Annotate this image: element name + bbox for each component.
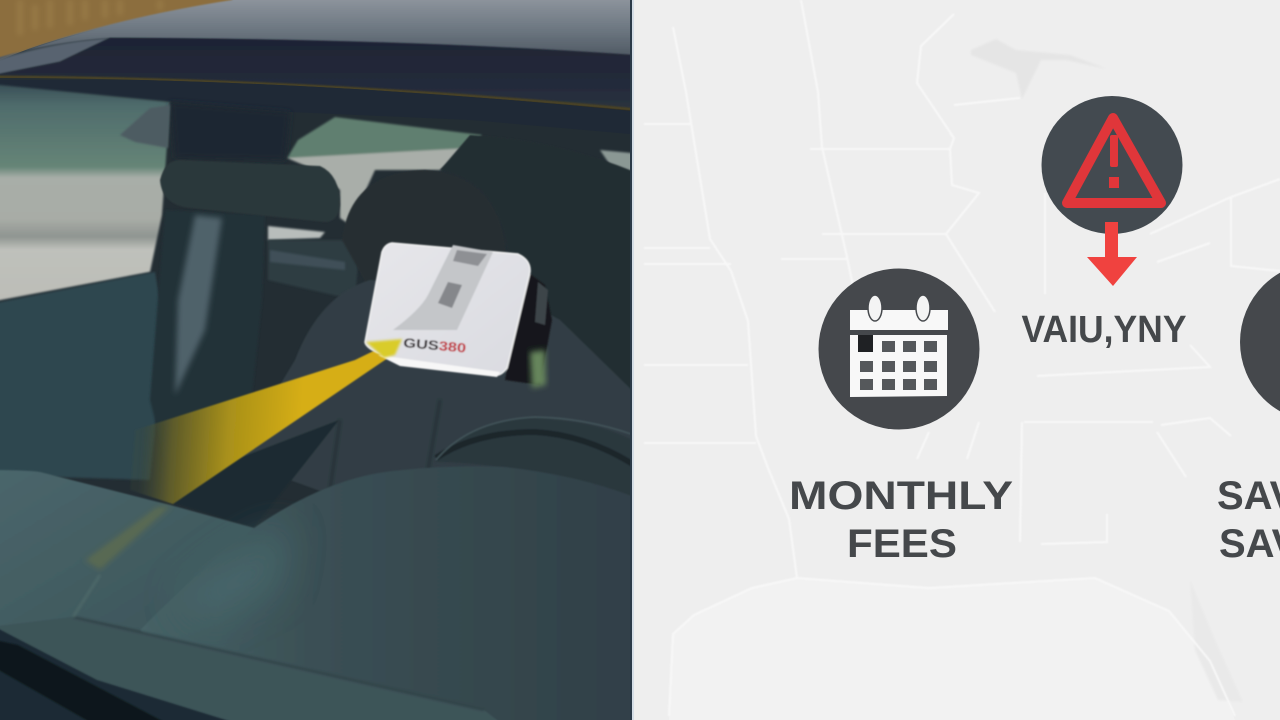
label: warning: VAIU,YNY [1022,309,1186,351]
icon: calendar [818,268,980,430]
icon: cropped circle [1240,262,1280,422]
dashboard [0,466,642,720]
windshield glass [0,78,642,720]
map: water and lakes [669,39,1243,720]
tracker device [365,243,552,388]
icon: warning triangle [1042,96,1182,234]
lower left shadow [0,627,242,720]
pillar and seat belt [150,296,165,421]
label: monthly fees [789,474,1013,566]
label: savings [1217,474,1280,566]
item: savings (cropped) [1217,262,1280,566]
item: warning [1022,96,1186,351]
car roof [0,0,650,115]
interior roof shadow [170,102,290,160]
map: state borders [644,0,1280,716]
rear view mirror [160,160,340,222]
steering wheel [434,416,630,467]
device label: GUS 380 [403,335,467,355]
wiper [0,640,170,720]
upper glass shade [144,80,519,101]
label: monthly fees: FEES [847,522,957,566]
mirror back [120,105,170,148]
item: monthly fees [789,268,1013,566]
side window view [0,84,170,302]
seat [173,135,642,528]
label: monthly fees: MONTHLY [789,474,1013,518]
left door panel [0,272,165,480]
yellow light beam [138,350,388,504]
rear console [268,240,360,300]
panel: map background [632,0,1280,720]
background field [0,0,240,60]
panel: car windshield photo [0,0,650,720]
rear window view [268,117,642,240]
arrow: down [1087,222,1137,286]
